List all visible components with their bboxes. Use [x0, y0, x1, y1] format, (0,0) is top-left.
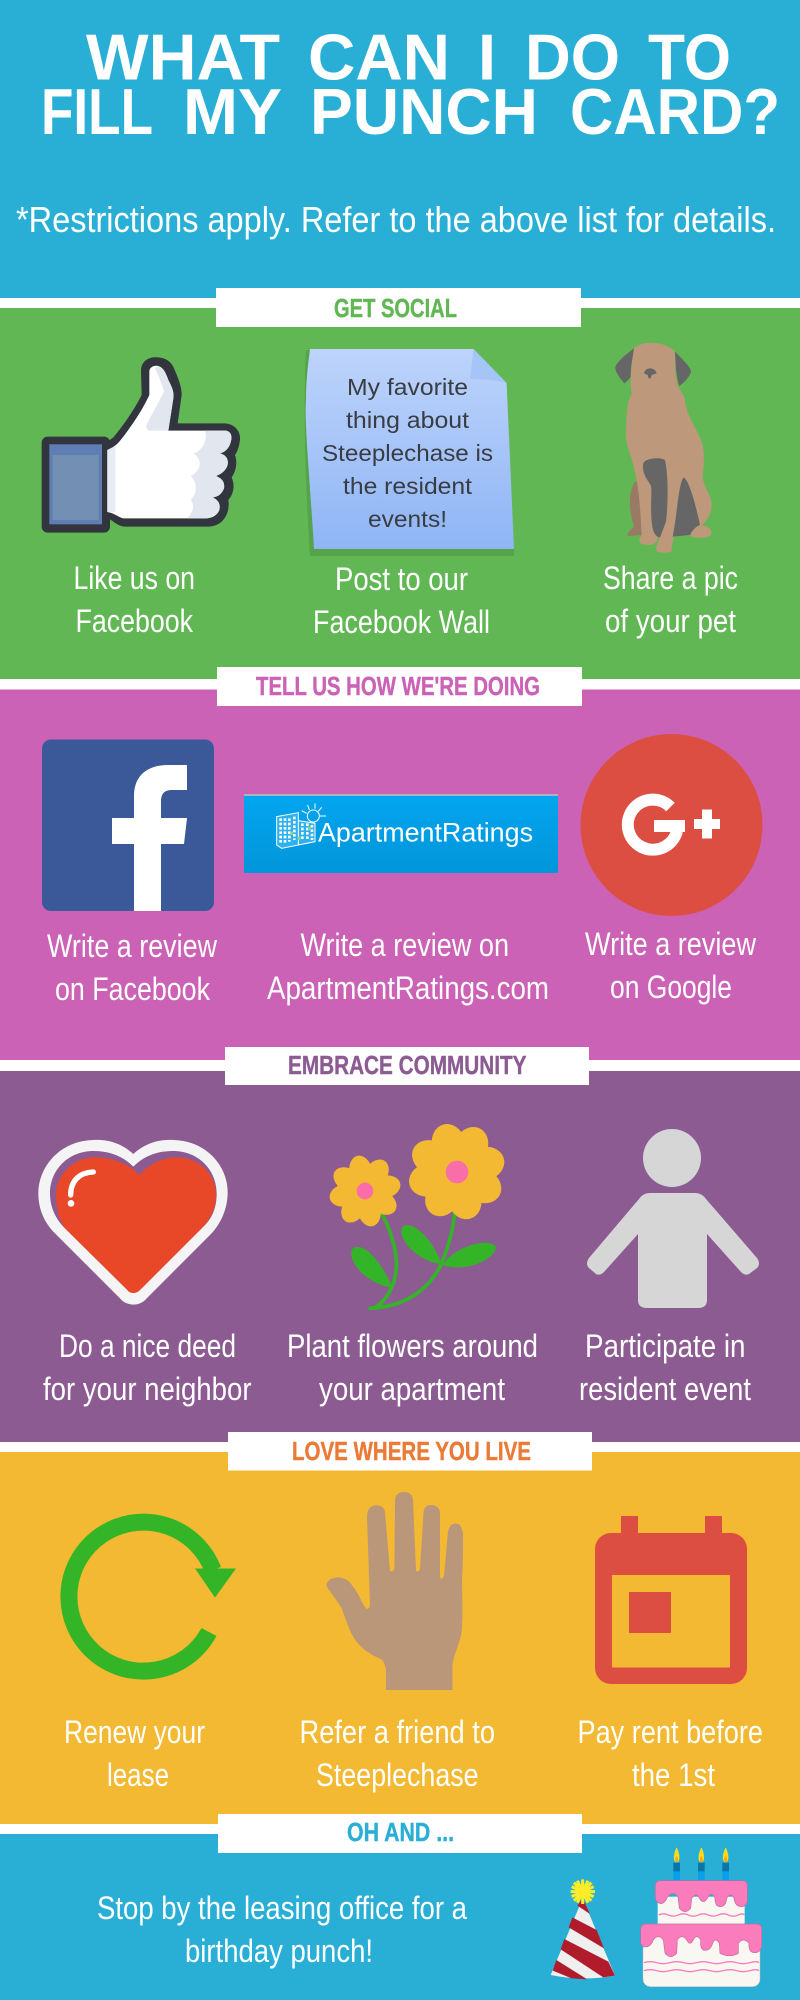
caption: plant flowers around your apartment: Plant flowers around — [287, 1328, 538, 1364]
caption: do a nice deed for your neighbor: for your neighbor — [43, 1371, 252, 1407]
caption: renew your lease — [64, 1714, 205, 1793]
caption: share a pic of your pet: of your pet — [605, 603, 736, 639]
caption: post to our facebook wall: Facebook Wall — [313, 604, 490, 640]
panel: oh and — [0, 1814, 800, 2000]
caption: write a review on apartmentratings.com — [267, 927, 549, 1006]
caption: share a pic of your pet — [603, 560, 738, 639]
title: MY — [183, 75, 282, 148]
icon: birthday cake — [641, 1847, 762, 1987]
section label: tell us how we're doing — [217, 667, 582, 706]
caption: participate in resident event — [579, 1328, 751, 1407]
icon: flowers — [327, 1120, 508, 1308]
icon: thumbs up — [42, 357, 240, 533]
icon: facebook logo — [42, 740, 214, 911]
title: FILL — [41, 75, 153, 148]
caption: birthday punch: birthday punch! — [185, 1933, 373, 1969]
caption: like us on facebook: Like us on — [74, 560, 195, 596]
note text: My favorite — [347, 374, 468, 400]
note text: thing about — [346, 407, 470, 433]
note text — [322, 374, 493, 532]
section label: embrace community: EMBRACE COMMUNITY — [288, 1050, 526, 1080]
caption: pay rent before the 1st: Pay rent before — [578, 1714, 763, 1750]
caption: plant flowers around your apartment — [287, 1328, 538, 1407]
caption: refer a friend to steeplechase — [300, 1714, 495, 1793]
icon: building and sun — [277, 803, 326, 848]
caption: write a review on apartmentratings.com: Write a review on — [300, 927, 509, 963]
icon: person — [587, 1129, 759, 1308]
caption: write a review on google — [585, 926, 757, 1005]
caption: write a review on apartmentratings.com: ApartmentRatings.com — [267, 970, 549, 1006]
icon: party hat — [551, 1879, 615, 1979]
candles — [673, 1847, 729, 1881]
caption: post to our facebook wall — [313, 561, 490, 640]
caption: renew your lease: lease — [107, 1757, 169, 1793]
logo text: ApartmentRatings — [318, 818, 533, 848]
icon: apartmentratings banner — [244, 794, 558, 873]
caption: post to our facebook wall: Post to our — [335, 561, 468, 597]
caption: write a review on facebook: on Facebook — [55, 971, 211, 1007]
section label: get social: GET SOCIAL — [334, 293, 457, 323]
section label: love where you live — [228, 1432, 592, 1470]
note text: the resident — [343, 473, 473, 499]
section label: love where you live: LOVE WHERE YOU LIVE — [292, 1436, 531, 1466]
caption: write a review on facebook — [47, 928, 218, 1007]
caption: birthday punch — [97, 1890, 467, 1969]
title: CARD? — [570, 75, 780, 148]
caption: refer a friend to steeplechase: Refer a friend to — [300, 1714, 495, 1750]
caption: share a pic of your pet: Share a pic — [603, 560, 738, 596]
panel: header — [0, 0, 800, 298]
panel: tell us how we're doing — [0, 667, 800, 1060]
caption: pay rent before the 1st — [578, 1714, 763, 1793]
title: PUNCH — [310, 75, 538, 148]
icon: calendar — [595, 1516, 747, 1684]
caption: participate in resident event: resident event — [579, 1371, 751, 1407]
caption: like us on facebook — [74, 560, 195, 639]
section label: get social — [216, 288, 581, 327]
caption: do a nice deed for your neighbor: Do a nice deed — [59, 1328, 236, 1364]
panel: get social — [0, 288, 800, 679]
caption: participate in resident event: Participate in — [585, 1328, 746, 1364]
caption: renew your lease: Renew your — [64, 1714, 205, 1750]
caption: plant flowers around your apartment: your apartment — [319, 1371, 505, 1407]
caption: birthday punch: Stop by the leasing office for a — [97, 1890, 467, 1926]
title: DO — [525, 20, 620, 94]
section label: oh and — [218, 1814, 582, 1853]
caption: like us on facebook: Facebook — [76, 603, 194, 639]
icon: heart — [38, 1140, 228, 1305]
caption: write a review on facebook: Write a review — [47, 928, 218, 964]
caption: do a nice deed for your neighbor — [43, 1328, 252, 1407]
title: WHAT — [86, 20, 280, 94]
title — [41, 20, 780, 148]
icon: google plus logo — [580, 734, 762, 916]
icon: raised hand — [326, 1492, 463, 1690]
icon: renew arrow — [69, 1522, 236, 1671]
caption: refer a friend to steeplechase: Steeplechase — [316, 1757, 479, 1793]
icon: dog — [615, 343, 712, 553]
panel: love where you live — [0, 1432, 800, 1824]
icon: sticky note — [305, 349, 514, 556]
caption: pay rent before the 1st: the 1st — [632, 1757, 715, 1793]
title: TO — [648, 20, 731, 94]
caption: write a review on google: on Google — [610, 969, 732, 1005]
section label: tell us how we're doing: TELL US HOW WE'RE DOING — [256, 671, 540, 701]
caption: write a review on google: Write a review — [585, 926, 757, 962]
section label: oh and: OH AND ... — [347, 1817, 454, 1847]
note text: Steeplechase is — [322, 440, 493, 466]
title: I — [478, 20, 496, 94]
section label: embrace community — [225, 1047, 589, 1085]
title: CAN — [308, 20, 450, 94]
panel: embrace community — [0, 1047, 800, 1442]
note text: events! — [368, 506, 447, 532]
